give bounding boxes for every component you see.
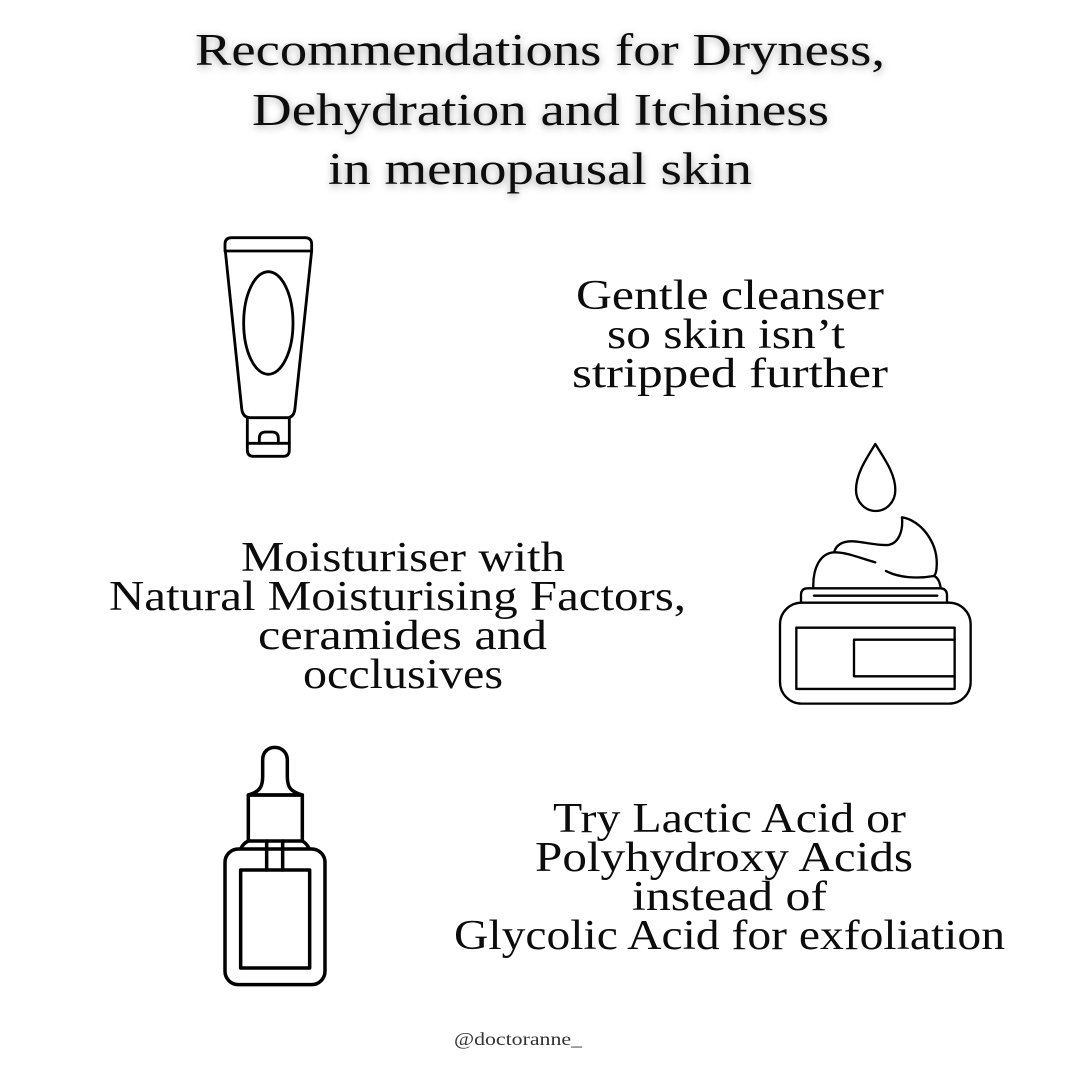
text: moisturiser	[109, 535, 686, 698]
handle: @doctoranne_	[454, 1029, 583, 1049]
text: gentle cleanser: Gentle cleanser	[576, 273, 884, 319]
text: exfoliation acids: Polyhydroxy Acids	[535, 835, 913, 881]
text: exfoliation acids	[454, 796, 1005, 959]
text: gentle cleanser: so skin isn’t	[607, 312, 845, 358]
text: moisturiser: ceramides and	[258, 613, 547, 659]
text: exfoliation acids: Glycolic Acid for exfoliation	[454, 913, 1005, 959]
text: moisturiser: Moisturiser with	[241, 535, 565, 581]
icon: moisturiser jar with drop	[780, 444, 971, 704]
text: gentle cleanser	[572, 273, 888, 397]
title	[195, 25, 885, 194]
title: Dehydration and Itchiness	[252, 85, 829, 135]
text: moisturiser: occlusives	[303, 652, 503, 698]
text: exfoliation acids: instead of	[632, 874, 827, 920]
text: moisturiser: Natural Moisturising Factors,	[109, 574, 686, 620]
title: in menopausal skin	[328, 144, 752, 194]
icon: cleanser tube	[225, 238, 312, 456]
icon: dropper serum bottle	[225, 747, 325, 985]
text: gentle cleanser: stripped further	[572, 351, 888, 397]
title: Recommendations for Dryness,	[195, 25, 885, 75]
text: exfoliation acids: Try Lactic Acid or	[553, 796, 906, 842]
